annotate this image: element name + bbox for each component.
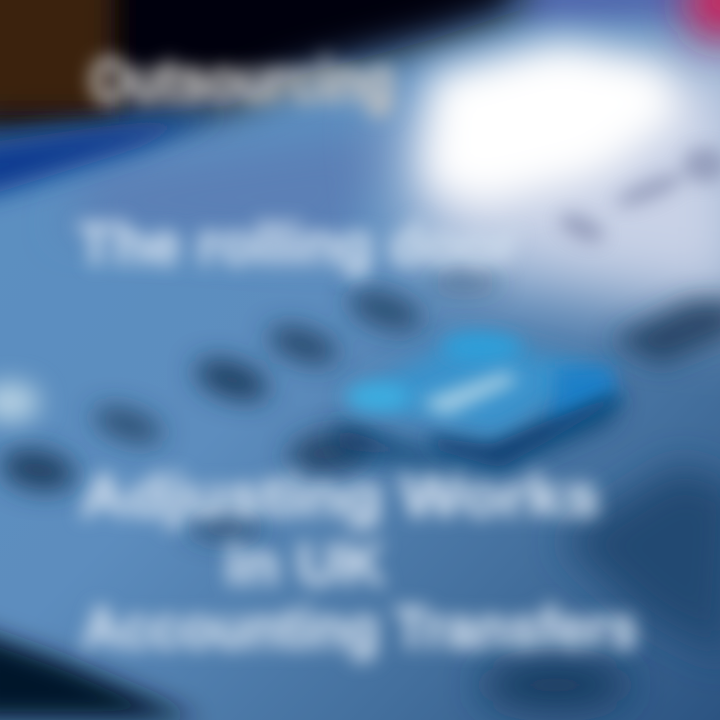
highlighted blue key	[335, 333, 625, 475]
white glow	[425, 40, 685, 205]
body text	[80, 464, 638, 661]
key 5	[0, 444, 79, 496]
keyboard keys	[0, 272, 720, 539]
key 3	[190, 351, 274, 409]
text line 1: Adjusting Works	[80, 464, 600, 529]
key 8	[610, 300, 720, 365]
top blue strip	[520, 0, 690, 20]
pink corner	[684, 0, 720, 40]
top dark band	[0, 0, 520, 135]
heading: Outsourcing	[90, 47, 395, 116]
key shadow	[335, 395, 620, 475]
subheading: The rolling door	[78, 212, 518, 277]
key top spot	[442, 333, 522, 361]
key face	[345, 335, 600, 440]
right side pale wash	[400, 40, 720, 320]
light spot on left edge	[0, 382, 40, 422]
key 4	[89, 400, 167, 450]
key pale mark	[420, 372, 520, 415]
text line 2: in UK	[225, 532, 385, 597]
dark lower-right	[560, 465, 720, 660]
key right side	[545, 365, 618, 430]
key 9	[429, 272, 501, 292]
dark bottom-left	[0, 628, 200, 720]
top-left brown corner	[0, 0, 115, 115]
faint streaks at upper right	[556, 147, 720, 248]
key 1	[344, 282, 426, 338]
text line 3: Accounting Transfers	[82, 596, 638, 661]
key 2	[264, 319, 342, 371]
dark bottom patch	[480, 661, 630, 709]
key 6	[286, 426, 374, 478]
upper blue zone	[60, 130, 400, 250]
key 7	[189, 517, 261, 539]
key underside	[425, 395, 625, 468]
key left spot	[346, 383, 410, 411]
deep blue edge	[0, 112, 225, 197]
